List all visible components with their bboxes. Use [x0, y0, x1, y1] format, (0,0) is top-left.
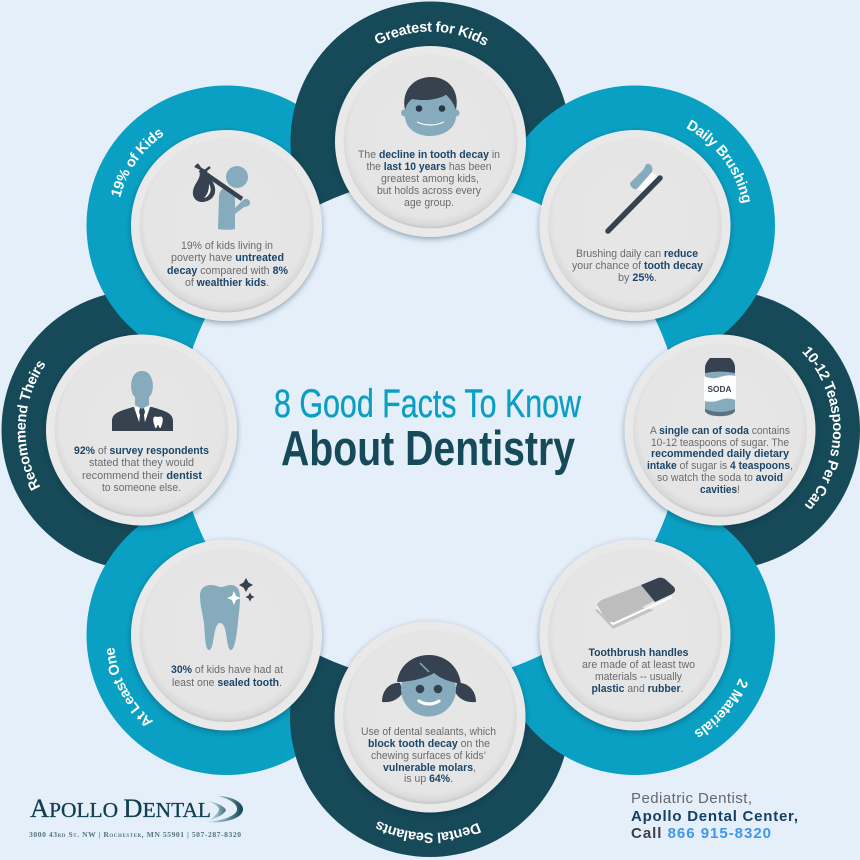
text: soda fact: intake of sugar is 4 teaspoons,	[647, 460, 793, 472]
icon: sparkling tooth	[200, 578, 254, 650]
panel: Dental Sealants	[334, 622, 526, 812]
text: materials fact	[582, 647, 695, 695]
contact: call to action: Pediatric Dentist,	[631, 790, 752, 807]
logo: Apollo Dental: APOLLO DENTAL	[30, 794, 211, 823]
text: recommend fact: 92% of survey respondents	[74, 445, 209, 457]
panel: At Least One	[131, 540, 322, 730]
text: greatest for kids fact: the last 10 years has been	[366, 161, 492, 173]
ring: At Least One	[86, 510, 296, 775]
title	[274, 382, 581, 476]
text: sealed tooth fact: least one sealed tooth.	[172, 677, 282, 689]
ring: Daily Brushing: Daily Brushing	[686, 120, 750, 204]
ring: Dental Sealants: Dental Sealants	[376, 822, 482, 844]
icon: toothbrush	[608, 164, 660, 231]
text: poverty fact: of wealthier kids.	[185, 277, 269, 289]
panel: Greatest for Kids	[335, 46, 526, 237]
text: sealed tooth fact: 30% of kids have had at	[171, 664, 284, 676]
text: recommend fact	[74, 445, 209, 494]
address: 3000 43rd St. NW | Rochester, MN 55901 | 507-287-8320	[29, 830, 241, 839]
panel: Daily Brushing	[540, 130, 730, 321]
text: soda fact	[647, 425, 793, 496]
ring: Recommend Theirs: Recommend Theirs	[17, 361, 45, 491]
text: sealants fact: Use of dental sealants, which	[361, 726, 496, 738]
title: About Dentistry	[281, 422, 575, 476]
contact: call to action: Apollo Dental Center,	[631, 808, 798, 825]
text: soda fact: A single can of soda contains	[650, 425, 790, 437]
icon: logo swoosh	[206, 796, 243, 822]
title: 8 Good Facts To Know	[274, 382, 581, 426]
ring: 10-12 Teaspoons Per Can	[722, 294, 860, 566]
ring: Greatest for Kids	[290, 2, 566, 205]
ring: At Least One: At Least One	[106, 648, 154, 726]
text: poverty fact: decay compared with 8%	[167, 265, 288, 277]
text: recommend fact: to someone else.	[102, 482, 181, 494]
panel: 19% of Kids	[131, 130, 322, 321]
icon: soda can	[704, 358, 736, 416]
panel: Recommend Theirs	[46, 334, 237, 526]
text: daily brushing fact: your chance of tooth decay	[572, 260, 704, 272]
text: materials fact: materials -- usually	[595, 671, 682, 683]
text: greatest for kids fact: greatest among kids,	[381, 173, 479, 185]
icon: man in suit	[112, 371, 173, 431]
text: sealed tooth fact	[171, 664, 284, 689]
text: sealants fact: vulnerable molars,	[383, 762, 476, 774]
text: greatest for kids fact	[358, 149, 500, 209]
icon: girl face	[382, 655, 476, 716]
contact: call to action	[631, 790, 798, 842]
ring: 10-12 Teaspoons Per Can: 10-12 Teaspoons Per Can	[802, 346, 841, 509]
text: recommend fact: recommend their dentist	[82, 470, 202, 482]
text: soda fact: recommended daily dietary	[651, 448, 790, 460]
ring: Greatest for Kids: Greatest for Kids	[375, 21, 488, 46]
text: soda fact: 10-12 teaspoons of sugar. The	[651, 437, 789, 449]
ring: Daily Brushing	[511, 86, 775, 350]
icon: toothbrush handle	[595, 578, 675, 629]
text: recommend fact: stated that they would	[89, 457, 194, 469]
text: sealants fact: is up 64%.	[404, 773, 453, 785]
text: daily brushing fact: by 25%.	[618, 272, 657, 284]
icon: child with bindle	[193, 164, 250, 230]
text: daily brushing fact	[572, 248, 704, 284]
text: soda fact: so watch the soda to avoid	[657, 472, 783, 484]
text: greatest for kids fact: The decline in tooth decay in	[358, 149, 500, 161]
icon: soda can: SODA	[708, 385, 732, 394]
ring: 2 Materials: 2 Materials	[694, 678, 748, 737]
text: poverty fact	[167, 240, 288, 289]
icon: boy face	[401, 77, 460, 136]
text: poverty fact: poverty have untreated	[171, 252, 284, 264]
panel: 10-12 Teaspoons Per Can	[624, 334, 816, 526]
ring: 19% of Kids	[86, 86, 296, 350]
panel: 2 Materials	[540, 540, 730, 730]
text: sealants fact: block tooth decay on the	[368, 738, 490, 750]
text: sealants fact: chewing surfaces of kids’	[371, 750, 486, 762]
ring: 2 Materials	[512, 510, 775, 775]
text: sealants fact	[361, 726, 496, 785]
text: greatest for kids fact: but holds across every	[377, 185, 481, 197]
text: materials fact: are made of at least two	[582, 659, 695, 671]
text: soda fact: cavities!	[700, 484, 740, 496]
text: poverty fact: 19% of kids living in	[181, 240, 273, 252]
text: materials fact: plastic and rubber.	[592, 683, 684, 695]
text: materials fact: Toothbrush handles	[588, 647, 688, 659]
ring: Recommend Theirs	[2, 294, 140, 566]
text: greatest for kids fact: age group.	[404, 197, 454, 209]
ring: 19% of Kids: 19% of Kids	[111, 130, 164, 198]
central circle	[179, 179, 681, 681]
text: daily brushing fact: Brushing daily can reduce	[576, 248, 698, 260]
contact: call to action: Call 866 915-8320	[631, 825, 771, 842]
ring: Dental Sealants	[290, 656, 564, 857]
